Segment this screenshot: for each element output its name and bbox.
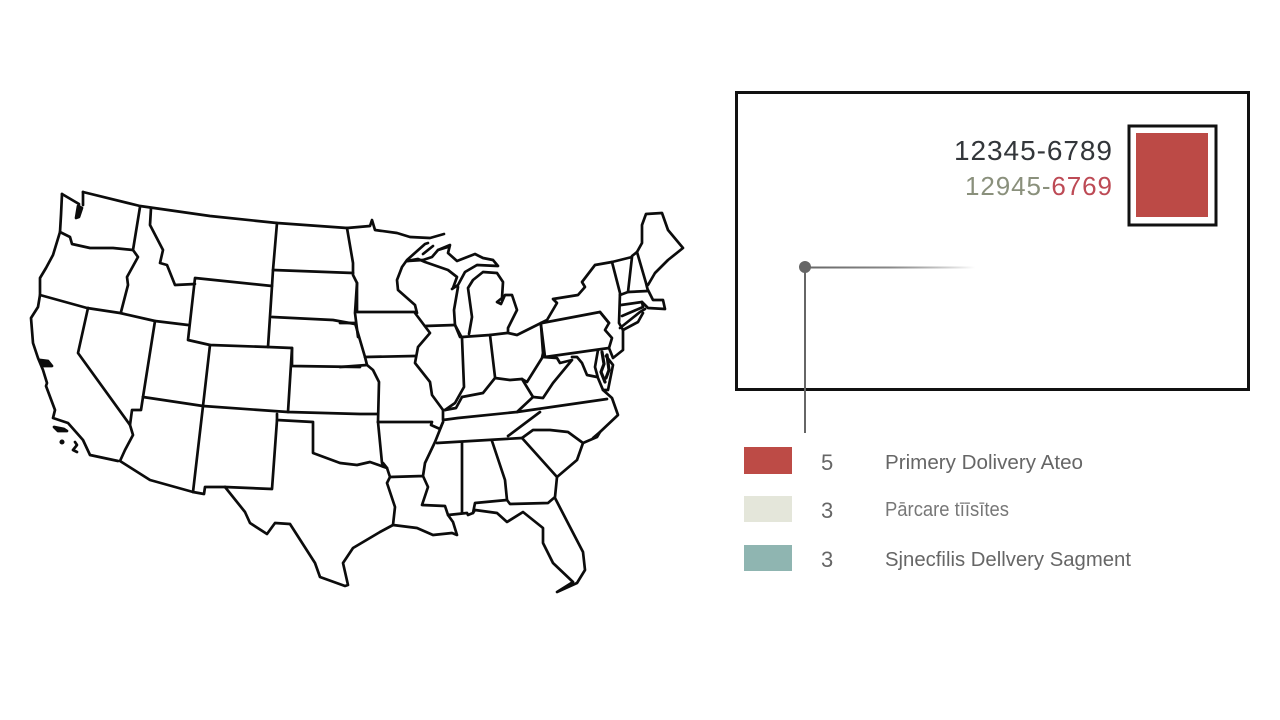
map: northeast states <box>541 213 683 330</box>
postal code secondary: 12945-6769 <box>965 171 1112 201</box>
map: great lakes states <box>407 245 543 410</box>
legend row: parcel limits: 3 <box>821 498 833 523</box>
map: western states <box>31 192 393 586</box>
legend row: primary delivery area: Primery Dolivery Ateo <box>885 452 1083 474</box>
postal code primary: 12345-6789 <box>954 135 1112 166</box>
legend row: parcel limits: Pārcare tīīsītes <box>885 499 1009 521</box>
legend row: primary delivery area <box>744 447 1083 475</box>
inset frame <box>736 92 1248 390</box>
legend row: specific delivery segment <box>744 545 1131 572</box>
icon: red stamp square <box>1129 126 1216 225</box>
map: central states <box>340 220 457 535</box>
map: islands and inlets <box>40 206 82 452</box>
callout leader line <box>799 261 975 433</box>
legend row: primary delivery area: 5 <box>821 450 833 475</box>
map: southern states <box>437 379 618 592</box>
panel: map detail inset <box>736 92 1248 433</box>
US states outline map <box>31 192 683 592</box>
map: mid-atlantic states <box>533 312 623 398</box>
legend row: specific delivery segment: Sjnecfilis Dellvery Sagment <box>885 549 1131 571</box>
legend <box>744 447 1131 572</box>
legend row: specific delivery segment: 3 <box>821 547 833 572</box>
legend row: parcel limits <box>744 496 1009 523</box>
